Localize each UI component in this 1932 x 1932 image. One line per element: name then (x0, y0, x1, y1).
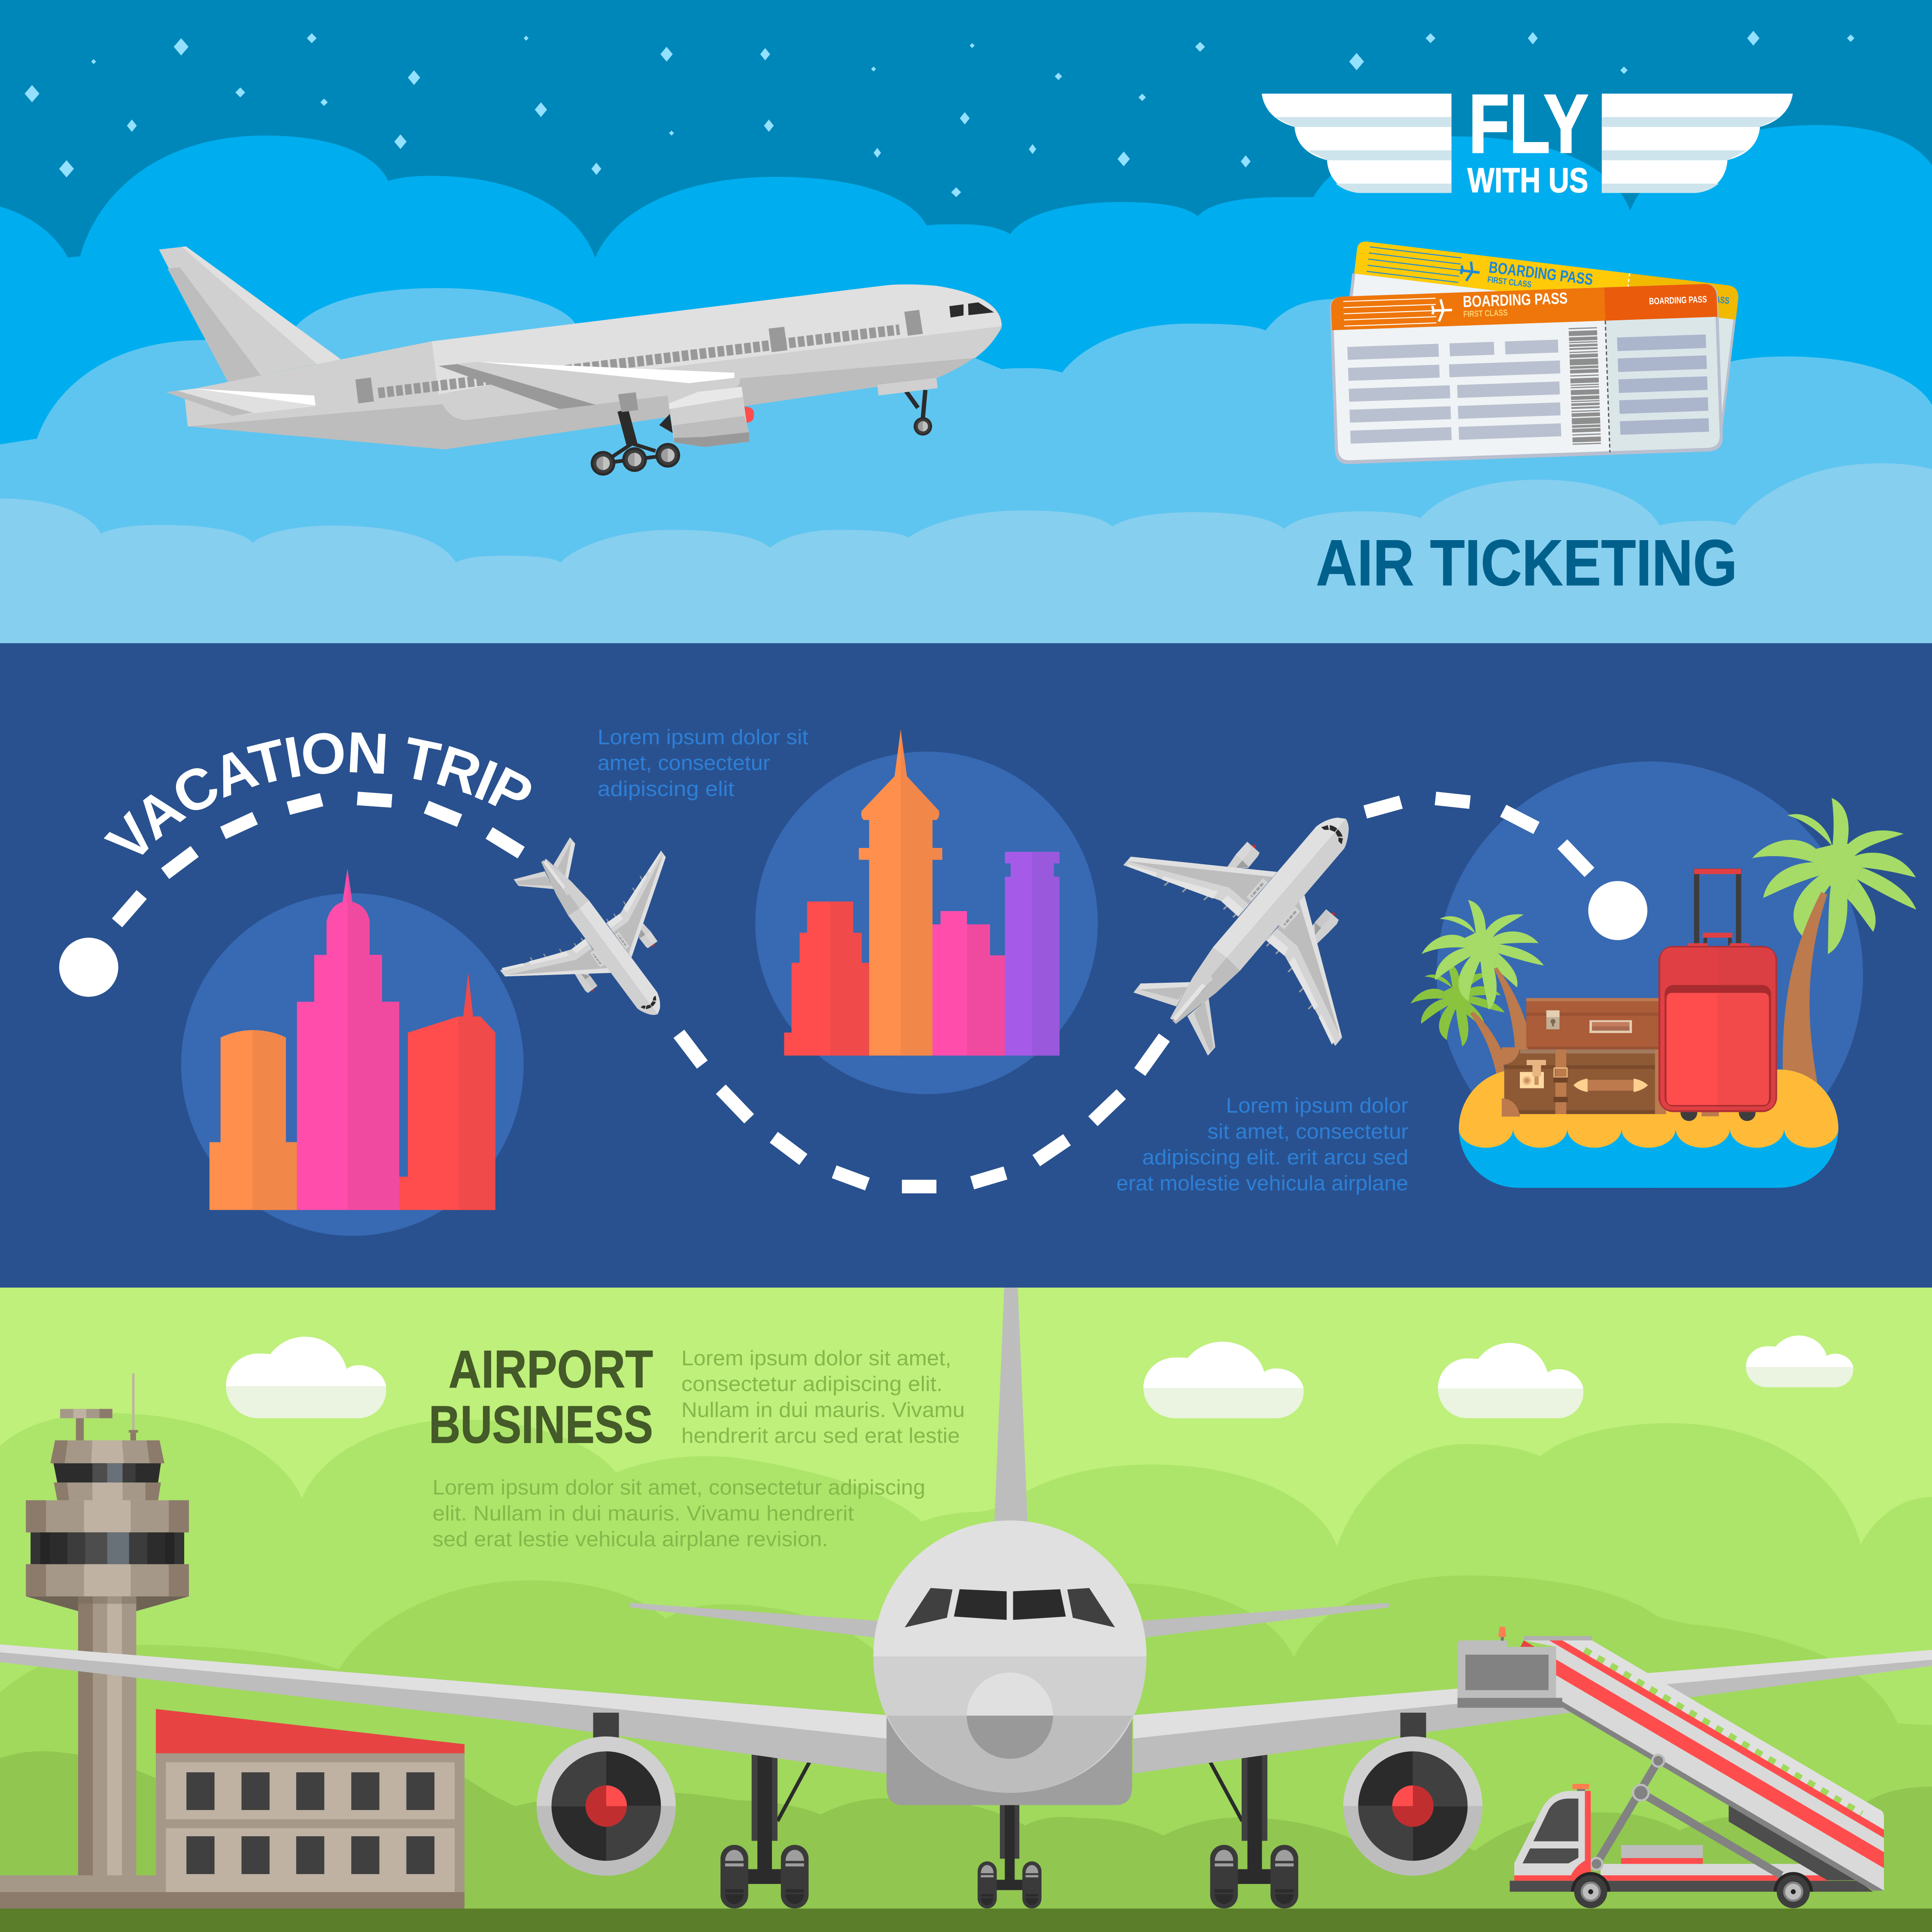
panel: airport business (0, 1288, 1932, 1932)
palm trees (1411, 784, 1932, 1091)
wing fairing (439, 384, 596, 420)
ticket: front: BOARDING PASS (1463, 289, 1568, 310)
right wing (1133, 1653, 1932, 1774)
ticket: rear (1339, 240, 1740, 430)
dashed route (117, 799, 1589, 1187)
large airplane (1123, 817, 1349, 1056)
clouds (226, 1336, 1853, 1418)
small airplane (491, 820, 694, 1016)
heading: airport business: BUSINESS (429, 1395, 653, 1455)
wing roots over gear (690, 1725, 1330, 1774)
airplane in flight (159, 246, 1002, 476)
text: upper caption: Lorem ipsum dolor sit (598, 726, 808, 749)
ground (0, 1908, 1932, 1932)
heading: fly: FLY (1469, 77, 1588, 170)
landing gear (623, 410, 632, 445)
cloud layer: front (0, 463, 1932, 644)
boarding stair truck (1458, 1627, 1884, 1908)
island (1459, 1069, 1838, 1188)
text: right paragraph: Lorem ipsum dolor sit amet, (681, 1347, 951, 1370)
ticket: rear: BOARDING PASS (1488, 258, 1594, 289)
text: lower caption: adipiscing elit. erit arcu sed (1142, 1146, 1408, 1169)
joints (1591, 1755, 1664, 1870)
heading: air ticketing: AIR TICKETING (1316, 526, 1738, 599)
text: right paragraph: hendrerit arcu sed erat lestie (681, 1425, 960, 1448)
ticket: front: BOARDING PASS (1649, 294, 1707, 307)
heading: airport business: AIRPORT (449, 1340, 653, 1399)
control tower (26, 1373, 189, 1875)
engines (537, 1713, 1482, 1876)
text: lower paragraph: elit. Nullam in dui mauris. Vivamu hendrerit (432, 1502, 854, 1525)
route end dot (1588, 881, 1647, 940)
heading: with us: WITH US (1467, 161, 1588, 200)
truck cab (1514, 1791, 1585, 1875)
text: lower caption: Lorem ipsum dolor (1226, 1094, 1408, 1118)
ticket: rear: FIRST CLASS (1487, 275, 1532, 290)
text: right paragraph: consectetur adipiscing elit. (681, 1373, 942, 1396)
fuselage (887, 1716, 1132, 1805)
text: lower caption: sit amet, consectetur (1208, 1120, 1408, 1143)
text: upper caption (598, 726, 808, 801)
city skyline left (210, 869, 495, 1210)
suitcases (1502, 869, 1777, 1121)
stair body (1524, 1640, 1884, 1891)
windows (378, 330, 899, 393)
stabilizer (166, 389, 316, 416)
cockpit windows (905, 1588, 1115, 1628)
stars (24, 31, 1854, 197)
landing gear (720, 1750, 1298, 1908)
city skyline centre (784, 729, 1060, 1056)
panel: air ticketing (0, 0, 1932, 644)
route start dot (59, 938, 118, 997)
platform cabin (1458, 1640, 1556, 1698)
airliner front view (537, 1288, 1932, 1908)
text: lower caption: erat molestie vehicula airplane (1116, 1172, 1408, 1195)
cloud layer: middle (0, 288, 1932, 644)
heading: airport business (429, 1340, 653, 1455)
ticket: front (1330, 283, 1723, 465)
terminal building (0, 1709, 465, 1908)
panel: vacation trip (0, 643, 1932, 1289)
circle backdrops (181, 752, 1863, 1236)
text: lower paragraph (432, 1476, 925, 1551)
engine (659, 414, 673, 433)
text: lower paragraph: sed erat lestie vehicula airplane revision. (432, 1528, 828, 1551)
heading: vacation trip curved: VACATION TRIP (94, 720, 541, 874)
fly with us wings (1262, 94, 1793, 193)
left wing of airliner (0, 1644, 887, 1774)
text: right paragraph: Nullam in dui mauris. Vivamu (681, 1398, 965, 1422)
ticket: rear: BOARDING PASS (1671, 289, 1730, 306)
wheels (1571, 1872, 1813, 1908)
text: lower caption (1116, 1094, 1408, 1195)
text: lower paragraph: Lorem ipsum dolor sit amet, consectetur adipiscing (432, 1476, 925, 1499)
red trolley case (1659, 869, 1777, 1121)
cloud layer: bright (0, 125, 1932, 644)
text: right paragraph (681, 1347, 965, 1448)
lift arms (1597, 1761, 1781, 1875)
nose (967, 1673, 1053, 1716)
ticket: front: FIRST CLASS (1463, 308, 1508, 319)
tail fin and stabilizers (994, 1288, 1027, 1523)
text: upper caption: adipiscing elit (598, 778, 735, 801)
text: upper caption: amet, consectetur (598, 752, 770, 775)
hills (0, 1413, 1932, 1932)
wing (439, 362, 740, 409)
